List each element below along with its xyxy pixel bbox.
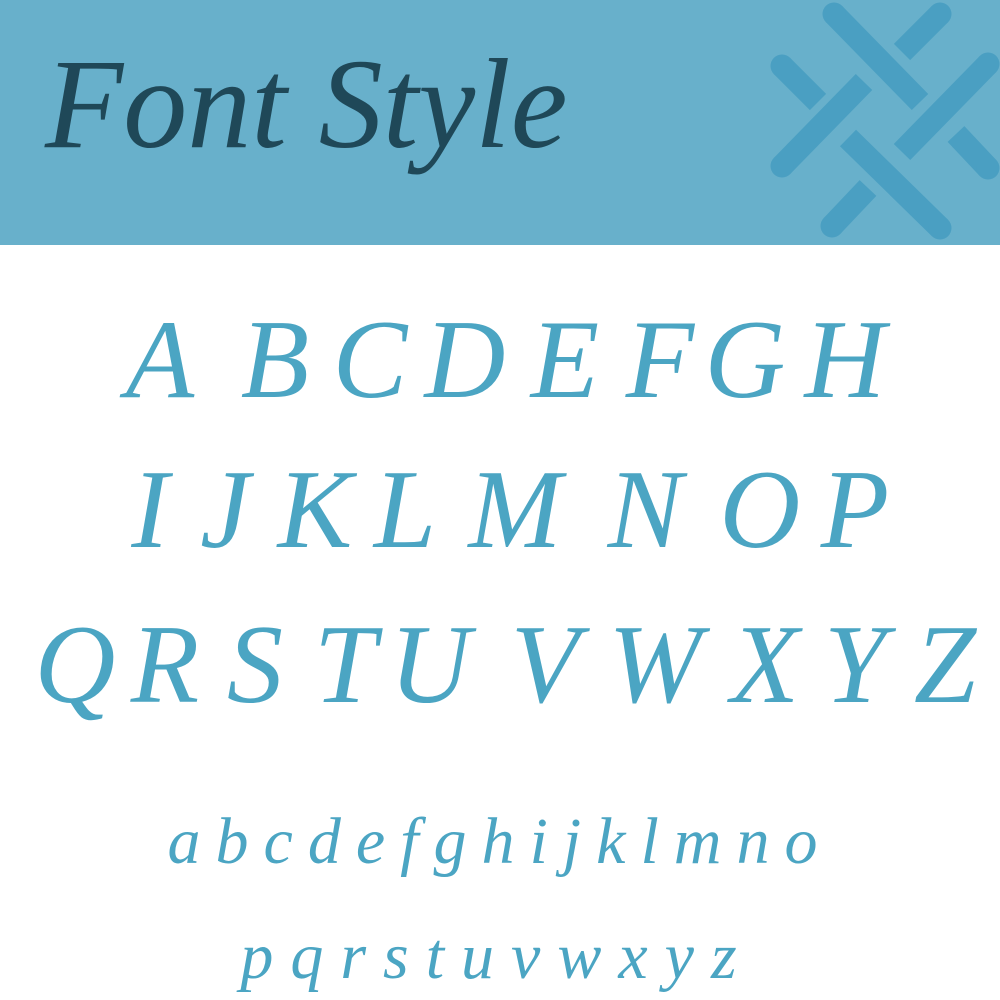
uppercase letters: Q <box>35 603 115 727</box>
uppercase letters: V <box>511 603 579 727</box>
uppercase letters: K <box>278 448 352 572</box>
uppercase letters: Z <box>914 603 976 727</box>
uppercase letters: E <box>531 298 599 422</box>
uppercase letters: A <box>126 298 194 422</box>
lowercase a-o: abcdefghijklmno <box>168 805 832 878</box>
uppercase letters: W <box>608 603 702 727</box>
lowercase p-z: pqrstuvwxyz <box>240 920 754 993</box>
uppercase letters: T <box>314 603 376 727</box>
uppercase letters: J <box>200 448 250 572</box>
uppercase letters: M <box>468 448 562 572</box>
uppercase letters: N <box>608 448 682 572</box>
uppercase letters: C <box>333 298 407 422</box>
uppercase letters: F <box>626 298 694 422</box>
uppercase letters: L <box>374 448 436 572</box>
icon: woven logo <box>770 2 1000 240</box>
uppercase letters: D <box>425 298 505 422</box>
uppercase letters: Y <box>824 603 886 727</box>
uppercase letters: X <box>731 603 799 727</box>
uppercase letters: H <box>805 298 885 422</box>
uppercase letters: G <box>705 298 785 422</box>
uppercase letters: O <box>720 448 800 572</box>
uppercase letters: S <box>227 603 283 727</box>
title: Font Style <box>45 33 568 175</box>
uppercase letters: P <box>821 448 889 572</box>
header band <box>0 0 1000 245</box>
uppercase letters: R <box>131 603 199 727</box>
uppercase letters: U <box>390 603 470 727</box>
uppercase letters: B <box>241 298 309 422</box>
uppercase letters: I <box>131 448 169 572</box>
